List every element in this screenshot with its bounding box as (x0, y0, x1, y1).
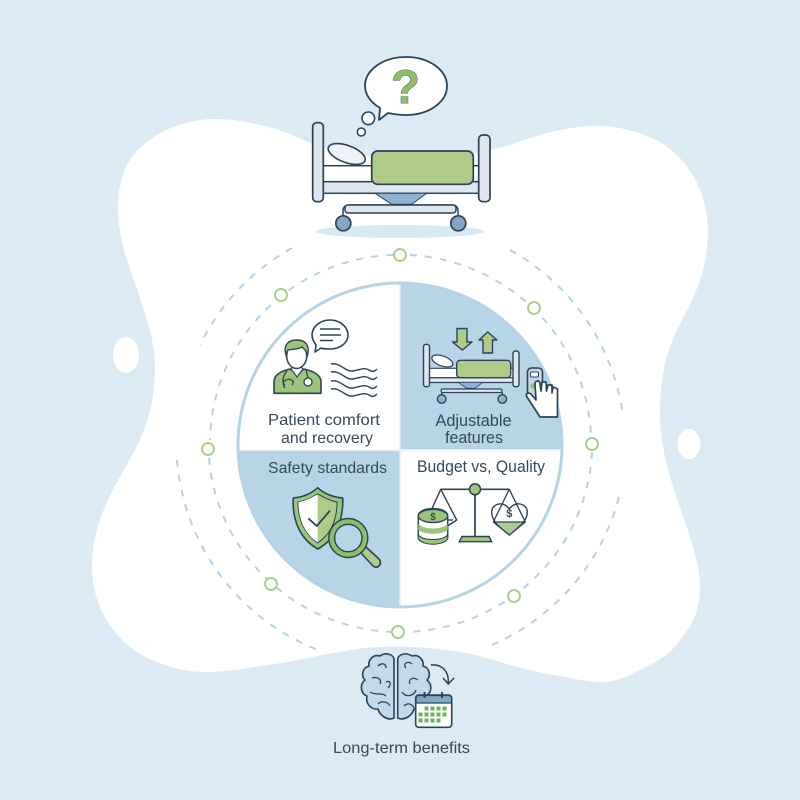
label: and recovery: and recovery (281, 430, 373, 447)
icon: brain with calendar (361, 654, 454, 727)
arrow up (479, 332, 497, 353)
doctor speech bubble (312, 320, 348, 352)
icon: balance scale (418, 484, 527, 544)
icon: hospital bed with question bubble (313, 57, 490, 238)
white blob background (92, 119, 708, 682)
bed shadow (316, 225, 484, 238)
white oval left (113, 337, 139, 373)
panel: decision circle (238, 283, 562, 607)
label: long-term benefits: Long-term benefits (333, 740, 470, 757)
icon: balance scale: $ (430, 512, 436, 523)
calendar (416, 695, 452, 727)
label: budget vs quality: Budget vs, Quality (417, 457, 545, 476)
label: features: features (445, 428, 503, 447)
icon: adjustable bed (424, 328, 558, 417)
waves (331, 364, 377, 396)
icon: balance scale: $ (506, 508, 512, 520)
arrow down (452, 328, 472, 350)
speech bubble (365, 57, 447, 120)
label: adjustable: Adjustable (436, 411, 512, 430)
heart pan (492, 504, 527, 535)
coins (418, 508, 448, 544)
label: patient comfort: Patient comfort (268, 412, 381, 429)
white oval right (678, 429, 700, 459)
bed frame (323, 166, 483, 182)
icon: shield with magnifier (293, 488, 380, 567)
arrow (431, 665, 454, 684)
dashed rings (177, 248, 623, 650)
question mark: ? (391, 60, 420, 113)
icon: doctor (274, 320, 377, 396)
hand with remote (528, 368, 542, 398)
ring nodes (202, 249, 598, 638)
label: safety standards: Safety standards (268, 460, 387, 477)
